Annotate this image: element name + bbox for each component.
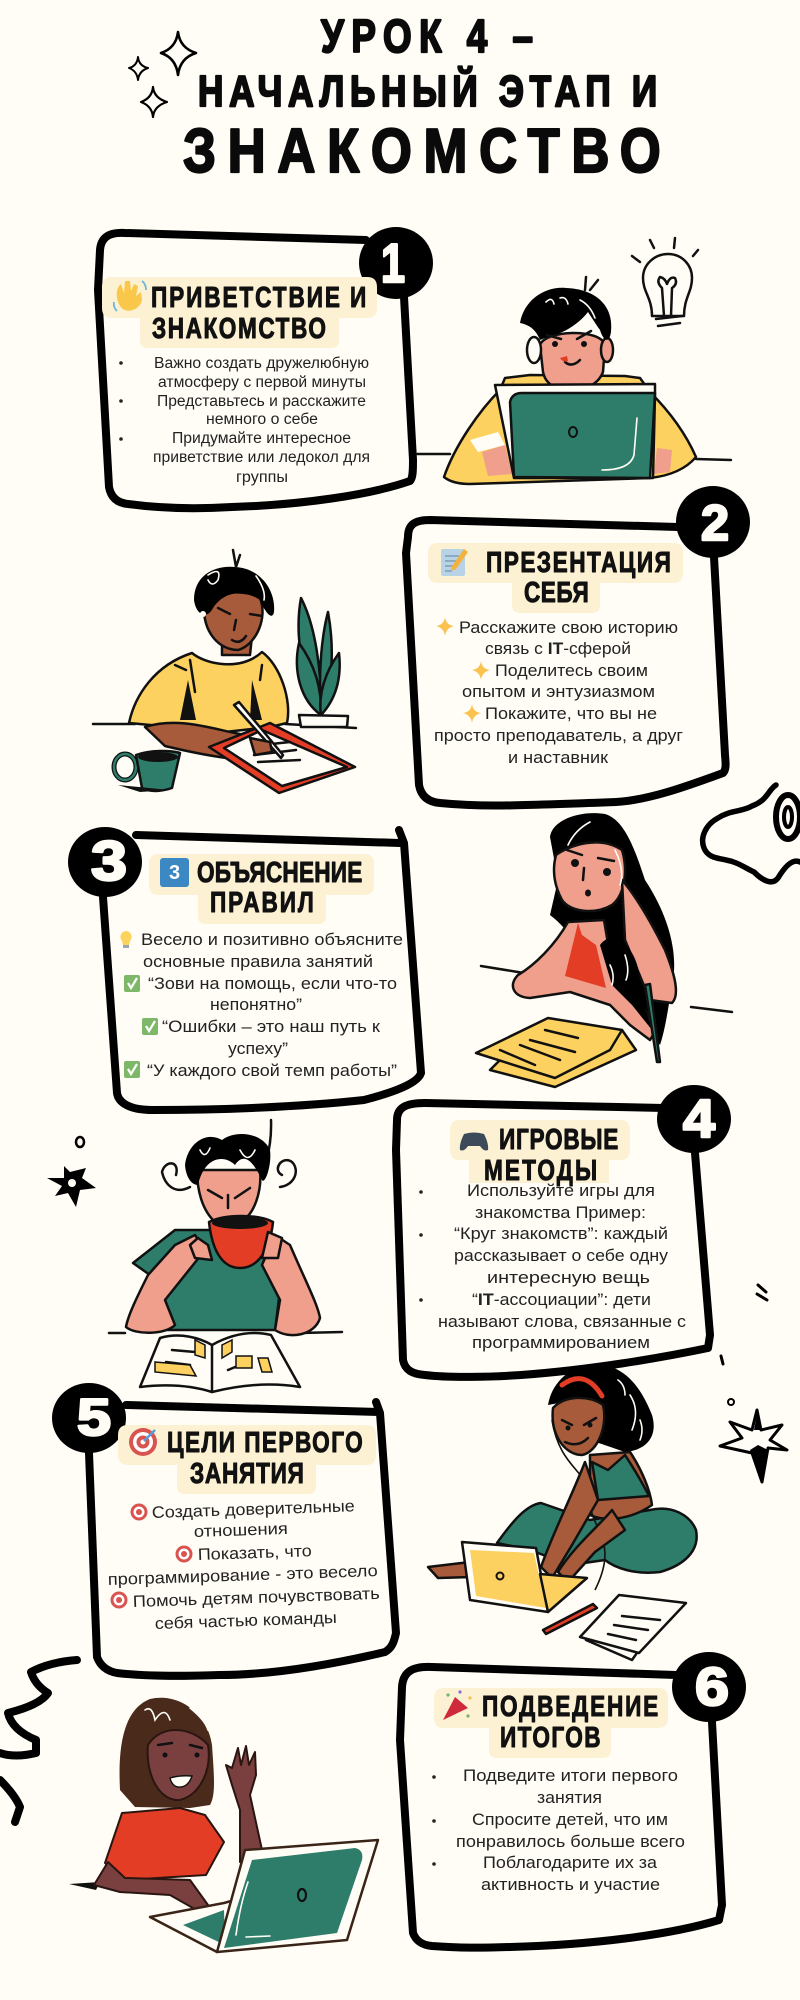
text block 1: атмосферу с первой минуты — [158, 374, 366, 391]
panel: step 2 self presentation — [406, 486, 750, 806]
illustration: boy with laptop and light bulb — [417, 238, 731, 484]
text block 5: отношения — [194, 1520, 288, 1541]
icon: gamepad — [460, 1132, 488, 1150]
heading 5: ЗАНЯТИЯ — [190, 1456, 304, 1490]
decoration: small dashes right — [721, 1285, 767, 1364]
text block 4: программированием — [472, 1334, 650, 1352]
illustration: girl waving behind a laptop — [69, 1698, 378, 1952]
text block 5: Создать доверительные — [152, 1497, 355, 1522]
card frame 1 — [98, 233, 413, 508]
panel: step 1 greeting — [98, 227, 433, 508]
text block 5: Помочь детям почувствовать — [133, 1585, 380, 1611]
text block 4: “IT-ассоциации”: дети — [472, 1291, 651, 1309]
icon: target — [129, 1428, 157, 1456]
text block 6: активность и участие — [481, 1876, 660, 1894]
text block 2: Покажите, что вы не — [485, 705, 657, 723]
heading 5: ЦЕЛИ ПЕРВОГО — [167, 1425, 363, 1459]
heading 2: СЕБЯ — [524, 575, 589, 609]
text block 2: просто преподаватель, а друг — [434, 727, 683, 745]
icon: waving hand — [114, 281, 146, 311]
number badge 5 — [52, 1383, 126, 1453]
tablet — [209, 723, 355, 793]
text block 1: Представьтесь и расскажите — [157, 393, 366, 410]
heading 6 — [482, 1689, 658, 1754]
card frame 3 — [103, 830, 421, 1110]
text block 4: “Круг знакомств”: каждый — [454, 1225, 668, 1243]
decoration: scribble blob top right — [703, 785, 800, 882]
laptop — [462, 1542, 587, 1612]
text block 5: себя частью команды — [155, 1609, 337, 1633]
heading 3: ОБЪЯСНЕНИЕ — [197, 855, 362, 889]
heading 2: ПРЕЗЕНТАЦИЯ — [486, 545, 671, 579]
papers — [476, 1018, 636, 1087]
number badge 2 — [676, 486, 750, 558]
text block 2: и наставник — [508, 749, 609, 767]
text block 6: занятия — [537, 1789, 602, 1807]
laptop — [150, 1840, 378, 1952]
text block 3: успеху” — [228, 1040, 288, 1058]
number badge 3: 3 — [91, 829, 127, 892]
text block 6 — [432, 1767, 685, 1894]
plant — [297, 598, 348, 727]
text block 4: интересную вещь — [487, 1269, 650, 1287]
icon: party popper — [443, 1690, 472, 1720]
heading 3: ПРАВИЛ — [210, 885, 314, 919]
heading 6: ИТОГОВ — [500, 1720, 601, 1754]
heading highlight 4 — [450, 1120, 630, 1183]
text block 6: Поблагодарите их за — [483, 1854, 658, 1872]
text block 4 — [419, 1182, 686, 1352]
number badge 6: 6 — [695, 1657, 729, 1717]
number badge 4: 4 — [683, 1089, 715, 1149]
decoration: star and dot left — [47, 1137, 96, 1207]
heading 4: МЕТОДЫ — [484, 1153, 597, 1187]
text block 3: “Ошибки – это наш путь к — [162, 1018, 381, 1036]
heading highlight 1 — [102, 277, 377, 348]
card frame 5 — [89, 1402, 396, 1676]
text block 2: Поделитесь своим — [495, 662, 648, 680]
heading 4 — [484, 1122, 618, 1187]
heading 1: ЗНАКОМСТВО — [152, 311, 326, 345]
heading 6: ПОДВЕДЕНИЕ — [482, 1689, 658, 1723]
text block 1: немного о себе — [206, 411, 318, 428]
decoration: star and dot right — [720, 1399, 787, 1482]
heading 5 — [167, 1425, 363, 1490]
number badge 4 — [657, 1085, 731, 1153]
panel: step 3 rules — [68, 827, 421, 1110]
number badge 5: 5 — [77, 1389, 111, 1447]
icon: memo — [441, 549, 468, 576]
icon: light bulb — [632, 238, 698, 326]
text block 4: называют слова, связанные с — [438, 1313, 686, 1331]
text block 2: Расскажите свою историю — [459, 619, 678, 637]
illustration: woman writing on a tablet — [93, 550, 356, 793]
illustration: woman sitting with a yellow laptop — [428, 1364, 697, 1660]
notebook — [580, 1595, 686, 1660]
icon: keycap 3: 3 — [169, 862, 180, 884]
heading highlight 5 — [118, 1425, 376, 1494]
number badge 3 — [68, 827, 142, 897]
text block 3: Весело и позитивно объясните — [141, 931, 403, 949]
text block 4: знакомства Пример: — [475, 1204, 646, 1222]
heading highlight 3 — [149, 854, 374, 924]
heading highlight 6 — [434, 1688, 668, 1758]
text block 2 — [434, 617, 683, 767]
text block 1: Придумайте интересное — [172, 430, 351, 447]
number badge 1: 1 — [381, 232, 405, 294]
text block 1: группы — [236, 469, 288, 486]
heading 4: ИГРОВЫЕ — [499, 1122, 618, 1156]
title: ЗНАКОМСТВО — [183, 117, 661, 186]
panel: step 6 summary — [400, 1652, 746, 1948]
icon: keycap 3 — [160, 858, 189, 887]
decoration: squiggle left — [0, 1660, 77, 1822]
card frame 4 — [396, 1103, 710, 1377]
illustration: girl thinking with papers — [476, 813, 732, 1087]
text block 2: связь с IT-сферой — [485, 640, 631, 658]
text block 4: Используйте игры для — [467, 1182, 655, 1200]
text block 1: приветствие или ледокол для — [153, 449, 370, 466]
title: НАЧАЛЬНЫЙ ЭТАП И — [198, 65, 657, 116]
panel: step 5 goals — [52, 1383, 396, 1676]
text block 1 — [119, 355, 370, 486]
number badge 6 — [672, 1652, 746, 1722]
cup — [114, 751, 180, 792]
heading 1: ПРИВЕТСТВИЕ И — [151, 280, 366, 314]
title — [183, 10, 661, 186]
card frame 2 — [406, 520, 726, 806]
text block 3: основные правила занятий — [143, 953, 373, 971]
text block 3: “У каждого свой темп работы” — [147, 1062, 397, 1080]
title: УРОК 4 – — [321, 10, 533, 62]
text block 2: опытом и энтузиазмом — [462, 683, 655, 701]
heading 3 — [197, 855, 362, 919]
heading highlight 2 — [428, 543, 683, 613]
text block 5 — [108, 1497, 380, 1633]
illustration: person drinking from a mug over a book — [109, 1120, 342, 1392]
number badge 1 — [359, 227, 433, 299]
text block 6: Спросите детей, что им — [472, 1811, 668, 1829]
heading 1 — [151, 280, 366, 345]
icon: sparkle stars — [129, 32, 196, 117]
text block 3 — [120, 931, 403, 1080]
text block 6: понравилось больше всего — [456, 1833, 685, 1851]
book — [140, 1333, 300, 1392]
text block 3: непонятно” — [210, 996, 302, 1014]
text block 3: “Зови на помощь, если что-то — [148, 975, 397, 993]
card frame 6 — [400, 1667, 722, 1948]
panel: step 4 games — [396, 1085, 731, 1377]
text block 6: Подведите итоги первого — [463, 1767, 678, 1785]
number badge 2: 2 — [701, 495, 729, 551]
heading 2 — [486, 545, 671, 609]
text block 5: Показать, что — [198, 1542, 312, 1564]
text block 5: программирование - это весело — [108, 1562, 378, 1589]
text block 1: Важно создать дружелюбную — [154, 355, 369, 372]
text block 4: рассказывает о себе одну — [454, 1247, 669, 1265]
